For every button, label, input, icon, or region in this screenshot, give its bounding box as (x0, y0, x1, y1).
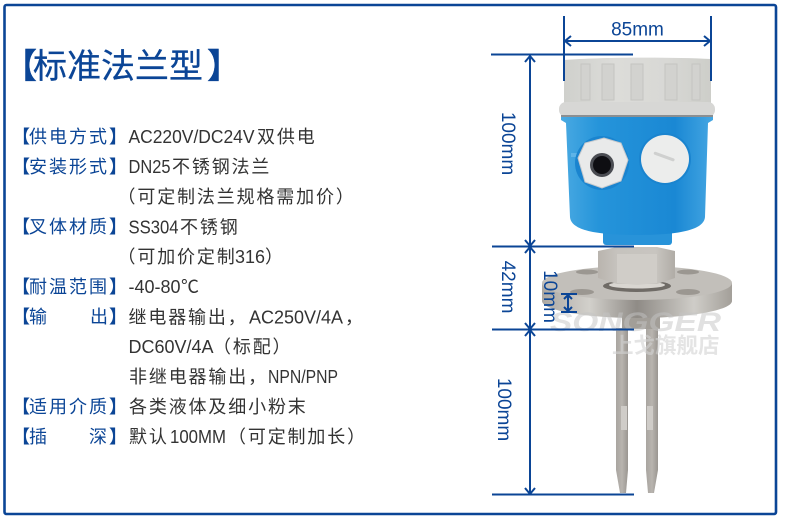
spec: applicable media: 各类液体及细小粉末 (129, 397, 308, 417)
spec: fork material: 】 (109, 217, 127, 237)
dimension lines (491, 16, 711, 494)
dimension: 100mm housing height: 100mm (497, 112, 518, 175)
spec: temperature range: -40-80 (128, 277, 180, 297)
spec: output: 】 (109, 307, 127, 327)
spec: fork material: 叉体材质 (29, 217, 109, 237)
spec: output: 继电器输出， (128, 308, 248, 328)
spec: fork material: SS304 (128, 218, 178, 238)
spec: insertion depth: 深 (89, 427, 109, 447)
spec: insertion depth: 】 (109, 427, 127, 447)
spec: fork material (12, 217, 285, 267)
spec: output: 输 (29, 307, 49, 327)
spec: power supply: AC220V/DC24V (128, 127, 254, 147)
spec: output: 出 (90, 307, 110, 327)
flange (542, 266, 732, 329)
spec: temperature range: 耐温范围 (29, 277, 109, 297)
watermark: SONGGER (550, 307, 722, 337)
spec: power supply: 供电方式 (29, 127, 109, 147)
spec: output (12, 307, 365, 387)
spec: fork material: （可加价定制 (118, 247, 237, 267)
spec: installation: 【 (12, 157, 30, 177)
spec: applicable media: 【 (12, 397, 30, 417)
spec: output: 【 (12, 307, 30, 327)
blanking plug (639, 133, 691, 185)
spec: insertion depth: 【 (12, 427, 30, 447)
dimension: 42mm flange height: 42mm (497, 261, 518, 313)
watermark: 上戈旗舰店 (612, 333, 720, 358)
spec: output: ， (345, 308, 365, 328)
blue housing (561, 117, 713, 245)
title: 【 (3, 48, 37, 86)
spec: fork material: 【 (12, 217, 30, 237)
spec: output: AC250V/4A (249, 308, 343, 328)
spec: temperature range: ℃ (181, 277, 201, 297)
spec: output: 非继电器输出， (129, 367, 268, 387)
spec: temperature range (12, 277, 201, 297)
watermark (550, 307, 722, 358)
spec: applicable media (12, 397, 308, 417)
specification list (12, 127, 367, 447)
dimension: 10mm flange thickness: 10mm (539, 270, 560, 323)
spec: installation: DN25 (128, 157, 170, 177)
spec: output: （标配） (213, 337, 292, 357)
spec: installation (12, 157, 356, 207)
dimension: 85mm width: 85mm (611, 20, 664, 40)
spec: temperature range: 【 (12, 277, 30, 297)
spec: fork material: 不锈钢 (180, 218, 240, 238)
spec: insertion depth (12, 427, 367, 447)
spec: power supply: 】 (109, 127, 127, 147)
spec: output: DC60V/4A (128, 337, 214, 357)
spec: insertion depth: 默认 (129, 427, 169, 447)
spec: installation: 安装形式 (29, 157, 109, 177)
spec: insertion depth: （可定制加长） (228, 427, 367, 447)
spec: power supply: 双供电 (257, 127, 317, 147)
dimension: 100mm insertion length: 100mm (493, 378, 514, 441)
hex nut (598, 247, 675, 292)
spec: installation: 不锈钢法兰 (172, 157, 271, 177)
spec: insertion depth: 插 (29, 427, 49, 447)
spec: fork material: ） (265, 247, 285, 267)
spec: temperature range: 】 (109, 277, 127, 297)
spec: power supply (12, 127, 317, 147)
fork tines (616, 328, 658, 493)
title: 标准法兰型 (33, 48, 203, 86)
spec: insertion depth: 100MM (170, 427, 226, 447)
product: fork level switch (542, 58, 732, 493)
cable gland (571, 136, 629, 190)
spec: installation: （可定制法兰规格需加价） (118, 187, 356, 207)
spec: output: NPN/PNP (268, 367, 338, 387)
spec: fork material: 316 (235, 247, 265, 267)
spec: installation: 】 (109, 157, 127, 177)
title: 】 (207, 48, 241, 86)
grey cap (559, 58, 715, 117)
spec: power supply: 【 (12, 127, 30, 147)
spec: applicable media: 】 (109, 397, 127, 417)
spec: applicable media: 适用介质 (29, 397, 109, 417)
